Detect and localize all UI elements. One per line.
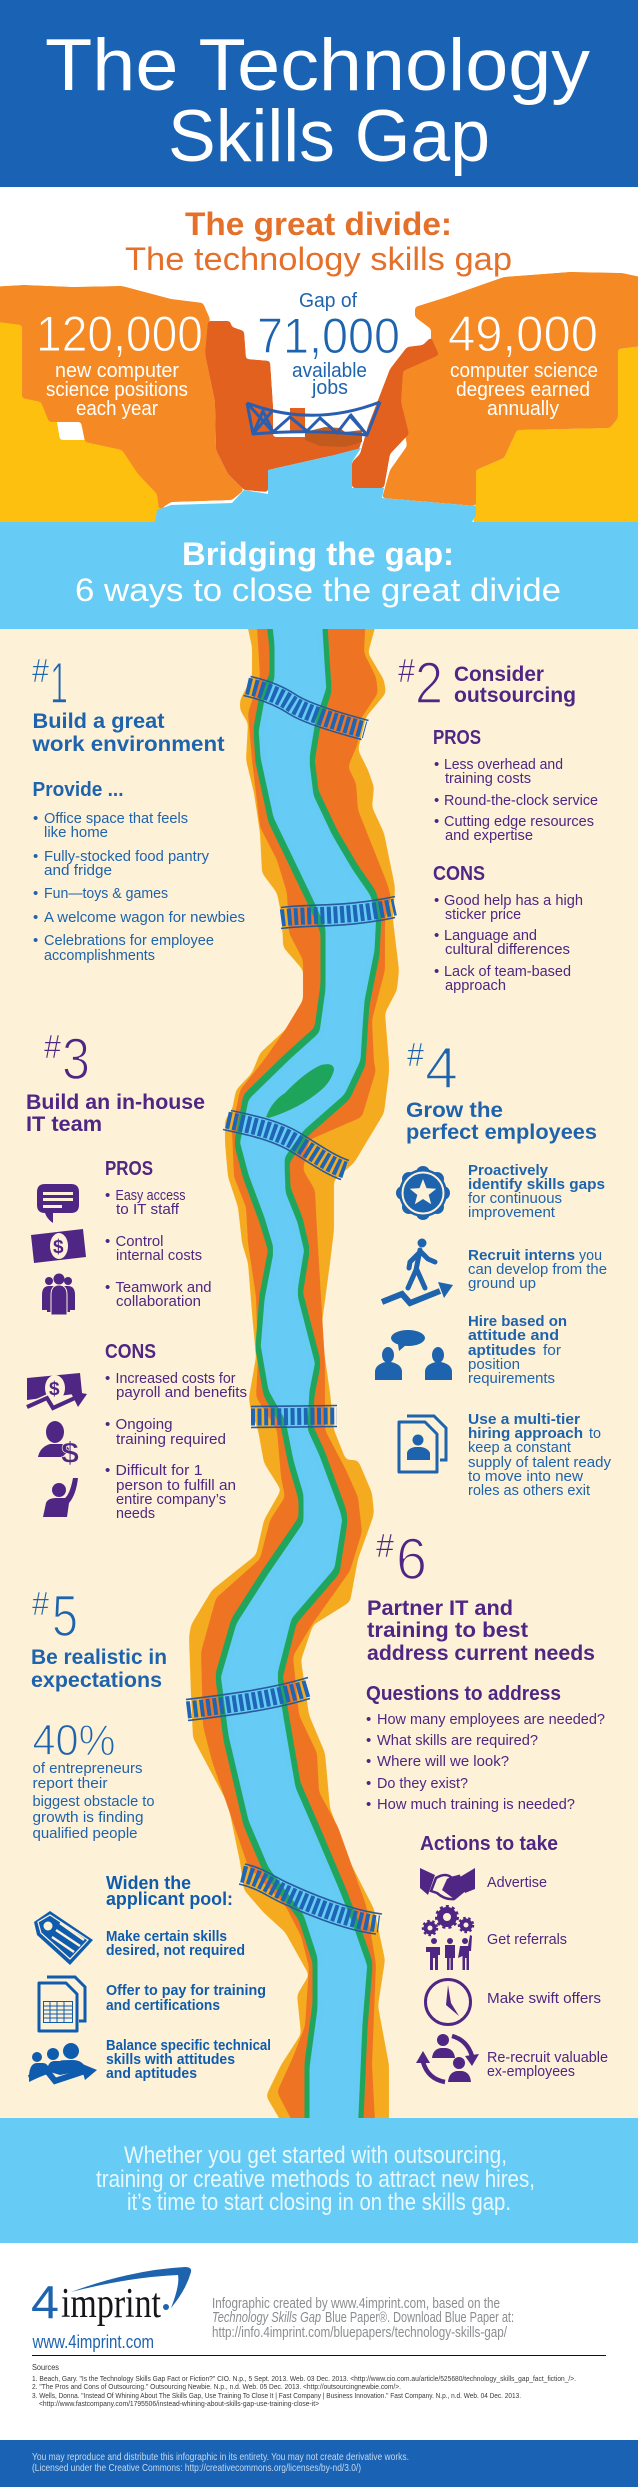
list: actions to take	[420, 1833, 608, 2080]
list: pros: •	[434, 813, 439, 830]
text: multi-tier hiring: to	[589, 1425, 601, 1442]
panel: tip 1	[31, 651, 245, 964]
river island	[266, 1064, 334, 1118]
stat: 49,000: annually	[487, 398, 559, 420]
list: widen the applicant pool	[106, 1873, 271, 2082]
credit text: Blue Paper®. Download Blue Paper at:	[325, 2309, 514, 2326]
heading 5	[31, 1646, 167, 1692]
icon: dollar bill	[31, 1229, 86, 1263]
list: cons: sticker price	[445, 906, 521, 923]
text: recruit interns: Recruit interns	[468, 1247, 575, 1264]
list: provide: Celebrations for employee	[44, 932, 214, 949]
list: provide: accomplishments	[44, 947, 155, 964]
icon: raised hand	[43, 1478, 78, 1517]
stat: 49,000: degrees earned	[456, 379, 590, 401]
bridge 3	[223, 1110, 349, 1180]
number 1	[32, 651, 68, 716]
footer band: You may reproduce and distribute this infographic in its entirety. You may not create derivative works.	[32, 2451, 409, 2463]
stat: 120,000: new computer	[55, 360, 179, 382]
text: recruit interns: ground up	[468, 1275, 536, 1292]
icon: person with dollar: $	[61, 1437, 79, 1470]
list: provide: •	[33, 848, 38, 865]
bridge 6	[239, 1864, 382, 1934]
stat: gap of 71,000: Gap of	[299, 290, 357, 312]
list: provide: Fun—toys & games	[44, 885, 168, 902]
text: identify skills gaps: Proactively	[468, 1162, 549, 1179]
number 6: #	[376, 1527, 395, 1564]
number 6: 6	[396, 1527, 427, 1592]
list: pros: Teamwork and	[116, 1279, 212, 1296]
list: widen the applicant pool: and certifications	[106, 1997, 220, 2014]
list: widen the applicant pool: Offer to pay for training	[106, 1982, 266, 1999]
stat: 49,000: computer science	[450, 360, 598, 382]
banner: bridging the gap: 6 ways to close the great divide	[75, 572, 561, 608]
heading: the great divide	[125, 206, 512, 277]
heading 3	[26, 1091, 205, 1136]
stat: 40 percent: biggest obstacle to	[32, 1793, 154, 1810]
text: multi-tier hiring: keep a constant	[468, 1439, 572, 1456]
number 5: 5	[52, 1584, 78, 1649]
heading 1: Build a great	[32, 710, 164, 733]
list: questions to address: Where will we look?	[377, 1753, 509, 1770]
text: hire on attitude: attitude and	[468, 1327, 559, 1344]
heading 2	[454, 663, 576, 707]
list: cons: needs	[116, 1505, 155, 1522]
heading 5: Be realistic in	[31, 1646, 167, 1669]
title: Skills Gap	[168, 96, 490, 177]
heading 5: expectations	[31, 1669, 162, 1692]
canyon illustration	[0, 272, 638, 535]
stat: 40 percent: report their	[32, 1775, 108, 1792]
list: cons: CONS	[433, 863, 485, 885]
list: cons	[105, 1341, 247, 1522]
title: The Technology	[45, 25, 591, 106]
list: actions to take: ex-employees	[487, 2063, 575, 2080]
icon: resume documents	[399, 1416, 446, 1472]
sources: 3. Wells, Donna. "Instead Of Whining About The Skills Gap, Use Training To Close It | Fast Company | Business Innovation." Fast Company. N.p., n.d. Web. 04 Dec. 2013.	[32, 2393, 521, 2400]
sources: Sources	[32, 2363, 59, 2372]
bridge 1	[244, 676, 368, 740]
list: widen the applicant pool: Make certain skills	[106, 1928, 227, 1945]
heading 1: work environment	[31, 733, 225, 756]
list: widen the applicant pool: skills with attitudes	[106, 2051, 235, 2068]
text: hire on attitude: aptitudes	[468, 1342, 536, 1359]
stat: 120,000: 120,000	[36, 306, 203, 362]
stat: gap of 71,000: available	[292, 360, 367, 382]
text: hire on attitude: position	[468, 1356, 520, 1373]
list: pros: •	[105, 1187, 110, 1204]
list: cons: entire company’s	[116, 1491, 226, 1508]
list: pros: Easy access	[116, 1187, 186, 1204]
list: provide: •	[33, 932, 38, 949]
number 2: 2	[415, 651, 443, 716]
bridge 5	[186, 1678, 310, 1720]
list: pros: •	[105, 1233, 110, 1250]
list: provide	[32, 779, 245, 964]
list: cons: person to fulfill an	[116, 1477, 236, 1494]
list: widen the applicant pool: Balance specific technical	[106, 2037, 271, 2054]
heading 6: training to best	[367, 1619, 528, 1642]
list: provide: Fully-stocked food pantry	[44, 848, 209, 865]
list: cons: cultural differences	[445, 941, 570, 958]
list: widen the applicant pool: Widen the	[106, 1873, 191, 1893]
stat: 49,000	[448, 306, 598, 420]
list: actions to take: Make swift offers	[487, 1990, 601, 2007]
icon: handshake	[420, 1868, 475, 1899]
list: questions to address: Do they exist?	[377, 1775, 468, 1792]
icon: chat bubble	[37, 1184, 79, 1223]
list: cons: CONS	[105, 1341, 156, 1363]
header band	[0, 0, 638, 187]
list: pros: internal costs	[116, 1247, 202, 1264]
footer band: (Licensed under the Creative Commons: http://creativecommons.org/licenses/by-nd/3.0/)	[32, 2462, 361, 2474]
list: pros: to IT staff	[116, 1201, 180, 1218]
credit text	[212, 2295, 514, 2341]
icon: gears and people	[423, 1906, 473, 1970]
list: cons: payroll and benefits	[116, 1384, 247, 1401]
icon: rising costs	[27, 1373, 87, 1408]
title	[45, 25, 591, 177]
sources: <http://www.fastcompany.com/1795506/instead-whining-about-skills-gap-use-training-close-it>	[39, 2401, 319, 2408]
list: cons: approach	[445, 977, 506, 994]
text: multi-tier hiring: Use a multi-tier	[468, 1411, 580, 1428]
bridge 4	[251, 1406, 337, 1428]
list: widen the applicant pool: desired, not required	[106, 1942, 245, 1959]
heading 6: address current needs	[367, 1642, 595, 1665]
stat: 40 percent: growth is finding	[32, 1809, 144, 1826]
list: questions to address: •	[366, 1796, 371, 1813]
panel: tip 5	[29, 1584, 271, 2082]
list: questions to address: •	[366, 1732, 371, 1749]
list: provide: •	[33, 885, 38, 902]
list: cons: •	[105, 1462, 110, 1479]
list: pros: training costs	[445, 770, 531, 787]
icon: dollar bill: $	[53, 1237, 64, 1258]
list: pros: •	[105, 1279, 110, 1296]
list: questions to address: •	[366, 1775, 371, 1792]
banner: closing message: it’s time to start closing in on the skills gap.	[127, 2189, 511, 2216]
river with banks	[189, 610, 399, 2140]
icon: team	[42, 1274, 75, 1315]
text: hire on attitude: requirements	[468, 1370, 555, 1387]
icon: walking up arrow	[382, 1238, 453, 1303]
credit text: Technology Skills Gap	[212, 2309, 321, 2326]
list: provide: and fridge	[44, 862, 112, 879]
icon: tag	[34, 1911, 93, 1965]
panel: tip 6	[366, 1527, 608, 2082]
logo: 4imprint	[31, 2267, 191, 2352]
heading: the great divide: The technology skills gap	[125, 241, 512, 277]
list: actions to take: Actions to take	[420, 1833, 558, 1855]
icon: rising costs: $	[49, 1379, 60, 1400]
sources	[32, 2363, 576, 2408]
banner: closing message	[0, 2118, 638, 2243]
heading: the great divide: The great divide:	[185, 206, 452, 242]
number 4	[407, 1036, 458, 1101]
list: cons: •	[105, 1416, 110, 1433]
banner: closing message: Whether you get started with outsourcing,	[124, 2142, 507, 2169]
icon: clock	[426, 1980, 470, 2024]
text: recruit interns: you	[579, 1247, 602, 1264]
list: provide: A welcome wagon for newbies	[44, 909, 245, 926]
list: questions to address: What skills are required?	[377, 1732, 538, 1749]
list: cons: Increased costs for	[116, 1370, 236, 1387]
stat: 40 percent: qualified people	[32, 1825, 138, 1842]
logo: 4imprint: imprint	[61, 2281, 161, 2327]
number 4: #	[407, 1036, 425, 1073]
list: pros	[433, 727, 598, 844]
footer band	[0, 2440, 638, 2487]
list: provide: Office space that feels	[44, 810, 188, 827]
list: cons: •	[434, 927, 439, 944]
list: cons: •	[105, 1370, 110, 1387]
number 2	[398, 651, 443, 716]
list: pros	[105, 1158, 212, 1310]
number 6	[376, 1527, 427, 1592]
heading 6	[367, 1597, 595, 1665]
panel: tip 2	[398, 651, 598, 994]
stat: 120,000	[36, 306, 203, 420]
list: cons: Ongoing	[116, 1416, 172, 1433]
number 4: 4	[425, 1036, 458, 1101]
text: identify skills gaps: identify skills gaps	[468, 1176, 605, 1193]
list: cons: Good help has a high	[444, 892, 583, 909]
list: questions to address: How much training is needed?	[377, 1796, 575, 1813]
icon: re-recruit cycle	[416, 2034, 479, 2082]
canyon bridge	[247, 402, 380, 435]
text: hire on attitude	[468, 1313, 567, 1387]
stat: 40 percent: of entrepreneurs	[32, 1760, 142, 1777]
text: hire on attitude: for	[543, 1342, 561, 1359]
number 2: #	[398, 652, 416, 689]
list: widen the applicant pool: applicant pool:	[106, 1889, 233, 1909]
list: pros: PROS	[105, 1158, 153, 1180]
icon: spreadsheet documents	[39, 1977, 85, 2031]
credit text: http://info.4imprint.com/bluepapers/technology-skills-gap/	[212, 2324, 508, 2341]
list: questions to address	[366, 1683, 605, 1813]
number 5: #	[32, 1585, 50, 1622]
heading 3: IT team	[26, 1113, 102, 1136]
stat: 49,000: 49,000	[448, 306, 598, 362]
banner: bridging the gap	[0, 522, 638, 629]
list: cons: •	[434, 892, 439, 909]
stat: gap of 71,000	[257, 290, 400, 399]
list: pros: •	[434, 756, 439, 773]
text: recruit interns	[468, 1247, 607, 1292]
list: pros: Control	[116, 1233, 164, 1250]
icon: group with arrow	[29, 2043, 97, 2082]
heading 4	[406, 1099, 597, 1144]
list: pros: •	[434, 792, 439, 809]
heading 1	[31, 710, 225, 756]
credit text: Infographic created by www.4imprint.com, based on the	[212, 2295, 500, 2312]
text: hire on attitude: Hire based on	[468, 1313, 567, 1330]
list: questions to address: •	[366, 1711, 371, 1728]
icon: conversation	[375, 1330, 452, 1380]
list: cons: •	[434, 963, 439, 980]
panel: tip 3	[26, 1027, 247, 1522]
logo: 4imprint: 4	[31, 2276, 59, 2328]
list: questions to address: How many employees are needed?	[377, 1711, 605, 1728]
text: identify skills gaps	[468, 1162, 605, 1221]
number 3: #	[44, 1028, 62, 1065]
list: pros: Cutting edge resources	[444, 813, 594, 830]
stat: 120,000: each year	[76, 398, 158, 420]
list: pros: collaboration	[116, 1293, 201, 1310]
list: provide: like home	[44, 824, 108, 841]
stat: 120,000: science positions	[46, 379, 188, 401]
list: provide: Provide ...	[32, 779, 124, 801]
stat: gap of 71,000: 71,000	[257, 308, 400, 364]
logo: 4imprint: www.4imprint.com	[32, 2332, 154, 2352]
list: actions to take: Advertise	[487, 1874, 547, 1891]
list: cons	[433, 863, 583, 994]
text: multi-tier hiring: to move into new	[468, 1468, 583, 1485]
list: actions to take: Re-recruit valuable	[487, 2049, 608, 2066]
list: provide: •	[33, 810, 38, 827]
list: pros: Less overhead and	[444, 756, 563, 773]
list: actions to take: Get referrals	[487, 1931, 567, 1948]
stat: gap of 71,000: jobs	[311, 377, 348, 399]
list: pros: Round-the-clock service	[444, 792, 598, 809]
heading 2: outsourcing	[454, 684, 576, 707]
bridge 2	[281, 896, 395, 928]
stat: 40 percent: 40%	[32, 1716, 116, 1765]
heading 2: Consider	[454, 663, 544, 686]
text: multi-tier hiring: roles as others exit	[468, 1482, 591, 1499]
list: questions to address: Questions to address	[366, 1683, 561, 1705]
heading 4: Grow the	[406, 1099, 503, 1122]
text: multi-tier hiring	[468, 1411, 611, 1499]
list: questions to address: •	[366, 1753, 371, 1770]
banner: closing message: training or creative methods to attract new hires,	[96, 2166, 535, 2193]
number 3: 3	[62, 1027, 90, 1092]
text: identify skills gaps: for continuous	[468, 1190, 562, 1207]
list: cons: training required	[116, 1431, 226, 1448]
panel: tip 4	[375, 1036, 611, 1499]
heading 3: Build an in-house	[26, 1091, 205, 1114]
list: cons: Lack of team-based	[444, 963, 571, 980]
text: multi-tier hiring: hiring approach	[468, 1425, 583, 1442]
icon: person with dollar	[38, 1421, 79, 1470]
number 1: #	[32, 652, 50, 689]
stat: 40 percent	[32, 1716, 154, 1842]
list: widen the applicant pool: and aptitudes	[106, 2065, 197, 2082]
heading 6: Partner IT and	[367, 1597, 513, 1620]
number 3	[44, 1027, 90, 1092]
text: recruit interns: can develop from the	[468, 1261, 607, 1278]
list: pros: and expertise	[445, 827, 533, 844]
list: cons: Difficult for 1	[116, 1462, 202, 1479]
number 5	[32, 1584, 78, 1649]
sources: 2. "The Pros and Cons of Outsourcing." Outsourcing Newbie. N.p., n.d. Web. 05 Dec. 2013. <http://outsourcingnewbie.com/>.	[32, 2384, 401, 2391]
icon: star badge	[396, 1166, 450, 1220]
heading 4: perfect employees	[406, 1121, 597, 1144]
banner: bridging the gap: Bridging the gap:	[182, 536, 454, 572]
list: cons: Language and	[444, 927, 537, 944]
sources: 1. Beach, Gary. "Is the Technology Skills Gap Fact or Fiction?" CIO. N.p., 5 Sept. 2013. Web. 03 Dec. 2013. <http://www.cio.com.au/article/525680/technology_skills_gap_fact_fiction_/>.	[32, 2376, 576, 2383]
number 1: 1	[50, 651, 68, 716]
list: provide: •	[33, 909, 38, 926]
list: pros: PROS	[433, 727, 481, 749]
text: identify skills gaps: improvement	[468, 1204, 556, 1221]
text: multi-tier hiring: supply of talent ready	[468, 1454, 611, 1471]
